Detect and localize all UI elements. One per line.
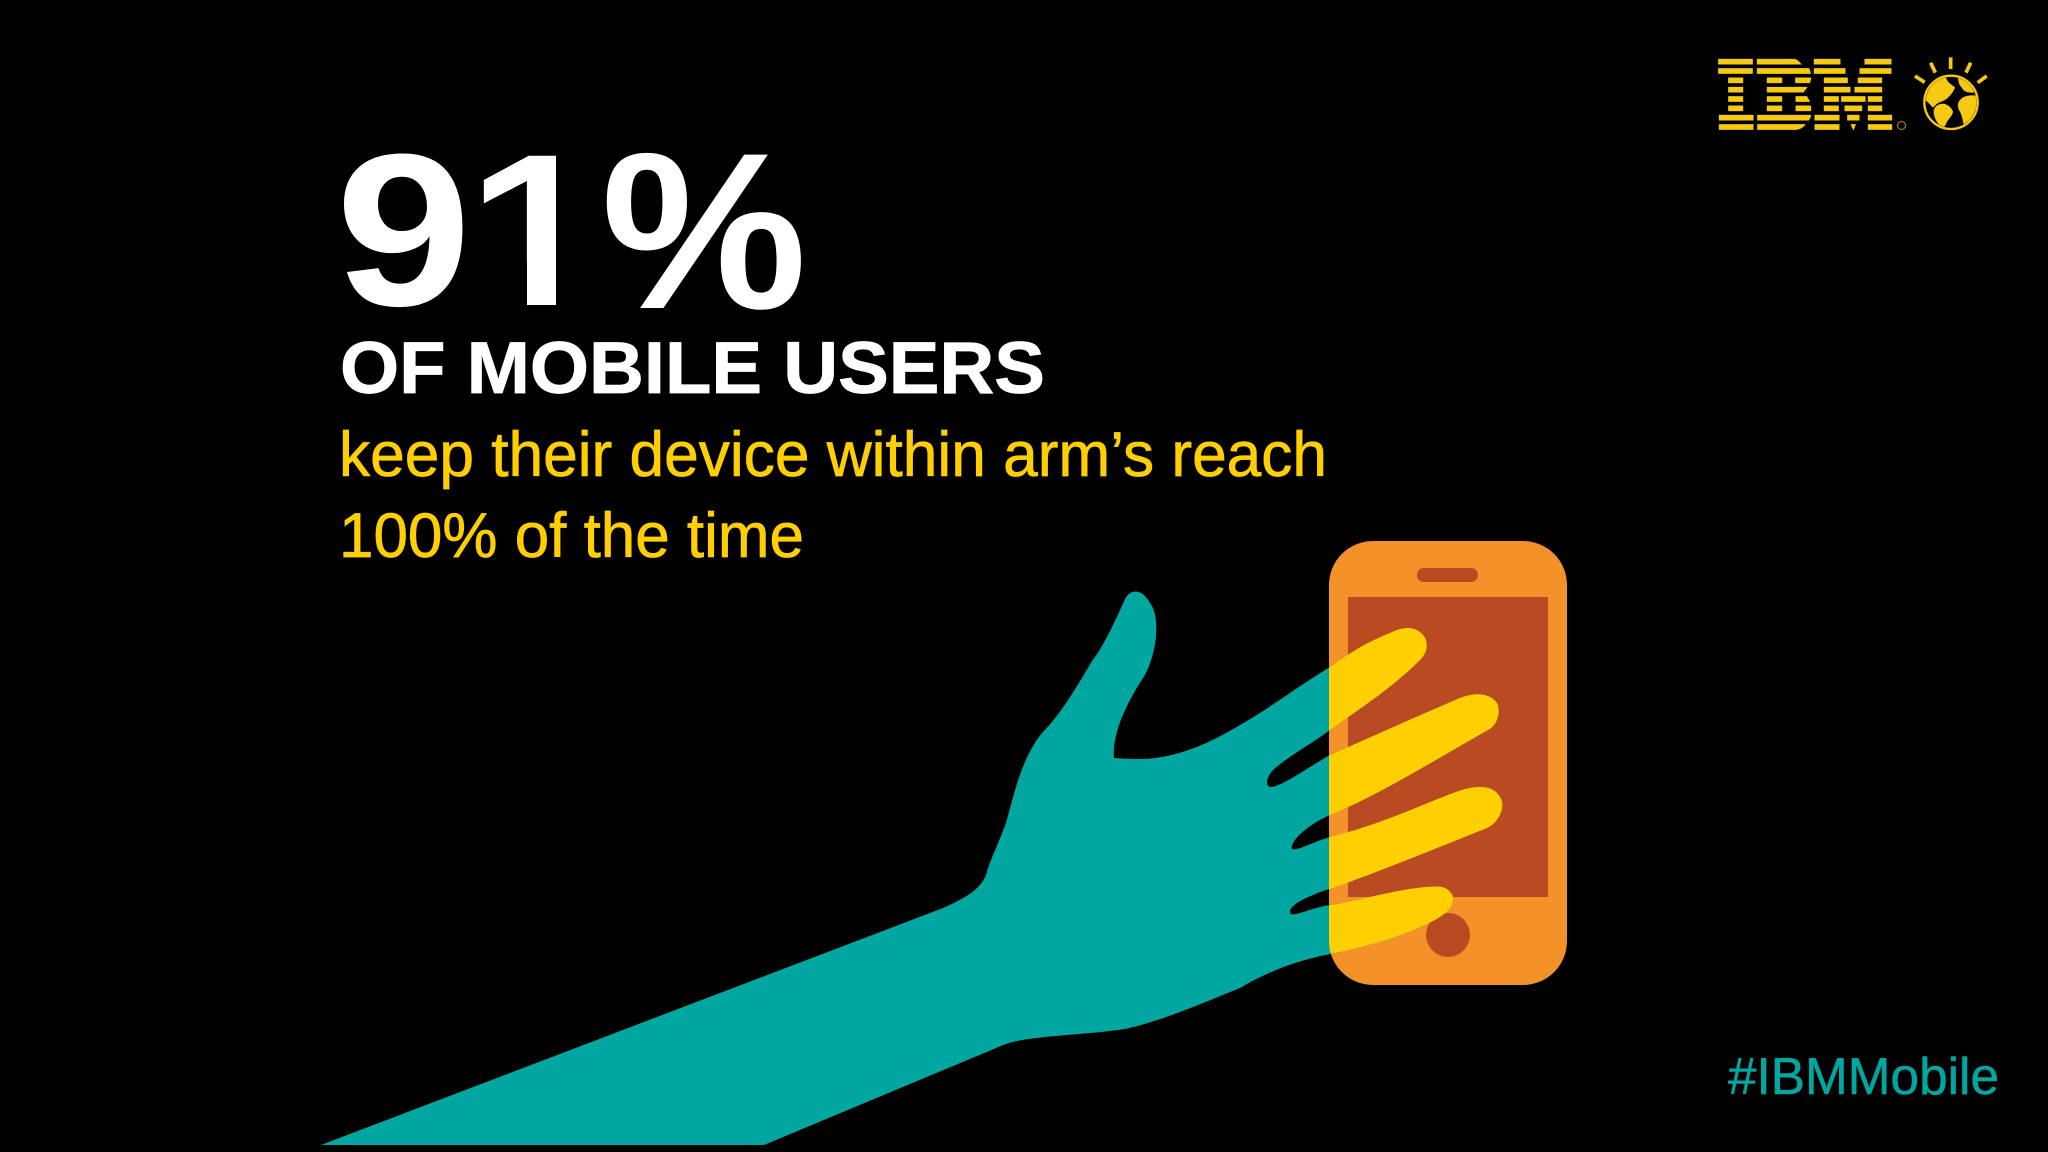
- hashtag: #IBMMobile: [1728, 1048, 1999, 1106]
- heading: 91%: 9: [336, 109, 472, 351]
- text block: statement: 100% of the time: [339, 501, 804, 571]
- globe continents: [1926, 78, 1976, 127]
- phone screen: [1348, 597, 1548, 897]
- icon: globe rays: [1915, 57, 1987, 83]
- heading: 91%: [344, 152, 801, 310]
- illustration: teal hand and arm: [321, 591, 1502, 1145]
- heading: 91%: %: [601, 107, 807, 356]
- text block: statement: [339, 420, 1327, 571]
- phone home button: [1426, 913, 1470, 957]
- icon: smarter planet globe: [1922, 75, 1982, 129]
- logo: registered mark: [1898, 122, 1906, 130]
- illustration: yellow fingers over phone: [1329, 628, 1502, 954]
- phone speaker: [1417, 568, 1478, 582]
- heading: 91%: 1: [466, 109, 611, 351]
- globe outline: [1924, 76, 1978, 129]
- subheading: of mobile users: OF MOBILE USERS: [340, 328, 1045, 409]
- logo: IBM striped wordmark: [1719, 59, 1892, 129]
- icon: phone: [1329, 541, 1567, 985]
- text block: statement: keep their device within arm’s reach: [339, 420, 1327, 490]
